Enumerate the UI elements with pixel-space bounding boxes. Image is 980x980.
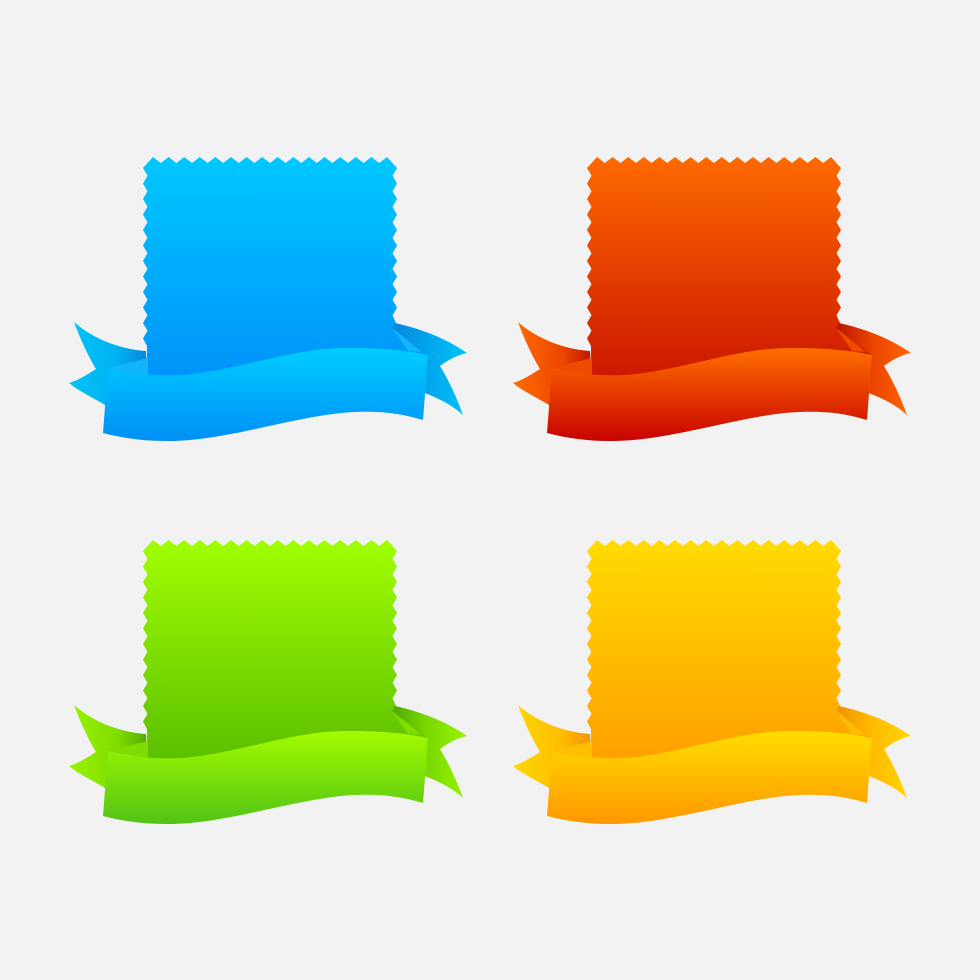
yellow left ribbon tail <box>513 705 591 788</box>
green ribbon front band <box>103 731 428 824</box>
blue ribbon fold highlights <box>108 328 422 378</box>
badge: red <box>513 157 911 441</box>
green left ribbon tail <box>69 705 147 788</box>
red ribbon front band <box>547 348 872 441</box>
badge: green <box>69 540 467 824</box>
yellow ribbon fold highlights <box>552 711 866 761</box>
green zigzag card <box>143 540 429 761</box>
blue left ribbon tail <box>69 322 147 405</box>
red right ribbon tail <box>836 323 911 415</box>
blue ribbon front band <box>103 348 428 441</box>
badge: blue <box>69 157 467 441</box>
green ribbon fold highlights <box>108 711 422 761</box>
red zigzag card <box>587 157 873 378</box>
badge: yellow <box>513 540 911 824</box>
green right ribbon tail <box>392 706 467 798</box>
yellow right ribbon tail <box>836 706 911 798</box>
red left ribbon tail <box>513 322 591 405</box>
blue zigzag card <box>143 157 429 378</box>
blue right ribbon tail <box>392 323 467 415</box>
yellow ribbon front band <box>547 731 872 824</box>
yellow zigzag card <box>587 540 873 761</box>
red ribbon fold highlights <box>552 328 866 378</box>
